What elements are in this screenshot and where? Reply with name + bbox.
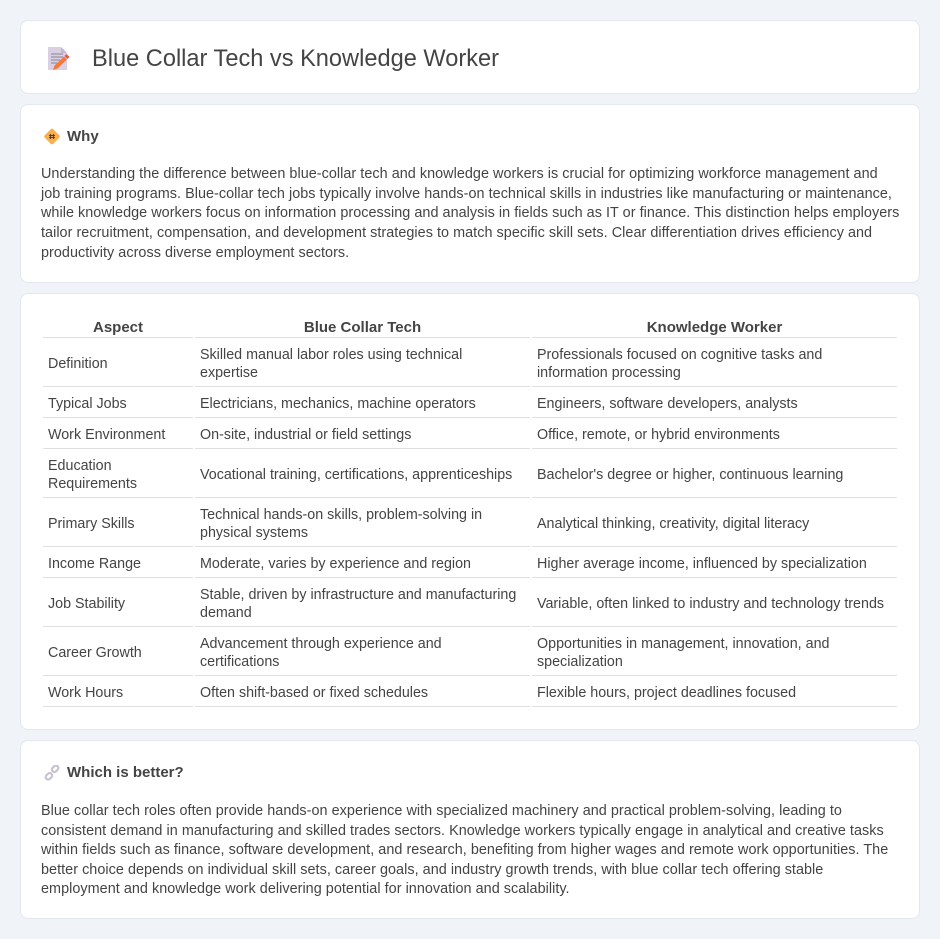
row: typical jobs — [43, 396, 897, 418]
row: work environment — [43, 427, 897, 449]
row: primary skills: physical systems — [200, 525, 308, 541]
row: career growth: Career Growth — [48, 645, 142, 661]
row: job stability: demand — [200, 605, 252, 621]
why text: tailor recruitment, compensation, and development strategies to match specific skill sets. Clear differentiation drives efficiency and — [41, 225, 872, 241]
row: work hours: Work Hours — [48, 685, 123, 701]
row: career growth: Opportunities in management, innovation, and — [537, 636, 829, 652]
title: Blue Collar Tech vs Knowledge Worker — [92, 46, 499, 72]
panel: why — [20, 104, 920, 283]
row: typical jobs: Engineers, software developers, analysts — [537, 396, 798, 412]
row: typical jobs: Typical Jobs — [48, 396, 127, 412]
row: work hours: Flexible hours, project deadlines focused — [537, 685, 796, 701]
which is better text: within fields such as finance, software development, and research, benefiting from higher wages and remote work opportunities. The — [41, 842, 888, 858]
why text: productivity across diverse employment sectors. — [41, 245, 349, 261]
row: education requirements — [43, 458, 897, 498]
row: definition — [43, 347, 897, 387]
row: job stability: Stable, driven by infrastructure and manufacturing — [200, 587, 516, 603]
heading: why: Why — [67, 128, 99, 145]
row: work hours: Often shift-based or fixed schedules — [200, 685, 428, 701]
row: job stability: Job Stability — [48, 596, 125, 612]
row: definition: information processing — [537, 365, 681, 381]
why text: job training programs. Blue-collar tech jobs typically involve hands-on technical skills in industries like manufacturing or maintenance, — [41, 186, 892, 202]
header card — [20, 20, 920, 94]
row: definition: Professionals focused on cognitive tasks and — [537, 347, 822, 363]
row: education requirements: Bachelor's degree or higher, continuous learning — [537, 467, 843, 483]
which is better text: consistent demand in manufacturing and skilled trades sectors. Knowledge workers typically engage in analytical and creative tasks — [41, 823, 884, 839]
why text: while knowledge workers focus on information processing and analysis in fields such as IT or finance. This distinction helps employers — [41, 205, 899, 221]
row: job stability — [43, 587, 897, 627]
table header: Blue Collar Tech — [304, 319, 421, 336]
row: education requirements: Education — [48, 458, 112, 474]
row: career growth: Advancement through experience and — [200, 636, 442, 652]
panel: which is better — [20, 740, 920, 919]
table header: Knowledge Worker — [647, 319, 782, 336]
icon: document with pencil — [48, 47, 70, 70]
which is better text: employment and knowledge work delivering potential for innovation and scalability. — [41, 881, 570, 897]
heading: which is better: Which is better? — [67, 764, 184, 781]
row: income range: Higher average income, influenced by specialization — [537, 556, 867, 572]
row: primary skills: Technical hands-on skills, problem-solving in — [200, 507, 482, 523]
row: primary skills: Primary Skills — [48, 516, 135, 532]
row: education requirements: Vocational training, certifications, apprenticeships — [200, 467, 512, 483]
row: primary skills — [43, 507, 897, 547]
row: work environment: Work Environment — [48, 427, 165, 443]
row: typical jobs: Electricians, mechanics, machine operators — [200, 396, 476, 412]
panel: comparison table — [20, 293, 920, 730]
row: career growth: certifications — [200, 654, 279, 670]
row: education requirements: Requirements — [48, 476, 137, 492]
table header: Aspect — [93, 319, 143, 336]
row: work environment: Office, remote, or hybrid environments — [537, 427, 780, 443]
why text: Understanding the difference between blue-collar tech and knowledge workers is crucial for optimizing workforce management and — [41, 166, 878, 182]
row: career growth: specialization — [537, 654, 623, 670]
icon: warning diamond — [44, 128, 60, 144]
row: career growth — [43, 636, 897, 676]
row: work environment: On-site, industrial or field settings — [200, 427, 411, 443]
row: definition: Skilled manual labor roles using technical — [200, 347, 462, 363]
icon: link — [44, 765, 60, 781]
row: job stability: Variable, often linked to industry and technology trends — [537, 596, 884, 612]
row: income range — [43, 556, 897, 578]
row: definition: Definition — [48, 356, 108, 372]
why text — [40, 166, 899, 261]
which is better text: Blue collar tech roles often provide hands-on experience with specialized machinery and practical problem-solving, leading to — [41, 803, 842, 819]
row: work hours — [43, 685, 897, 707]
which is better text — [41, 803, 888, 897]
which is better text: better choice depends on individual skill sets, career goals, and industry growth trends, with blue collar tech offering stable — [41, 862, 823, 878]
row: income range: Income Range — [48, 556, 141, 572]
table header — [43, 319, 897, 338]
row: income range: Moderate, varies by experience and region — [200, 556, 471, 572]
row: primary skills: Analytical thinking, creativity, digital literacy — [537, 516, 809, 532]
row: definition: expertise — [200, 365, 258, 381]
